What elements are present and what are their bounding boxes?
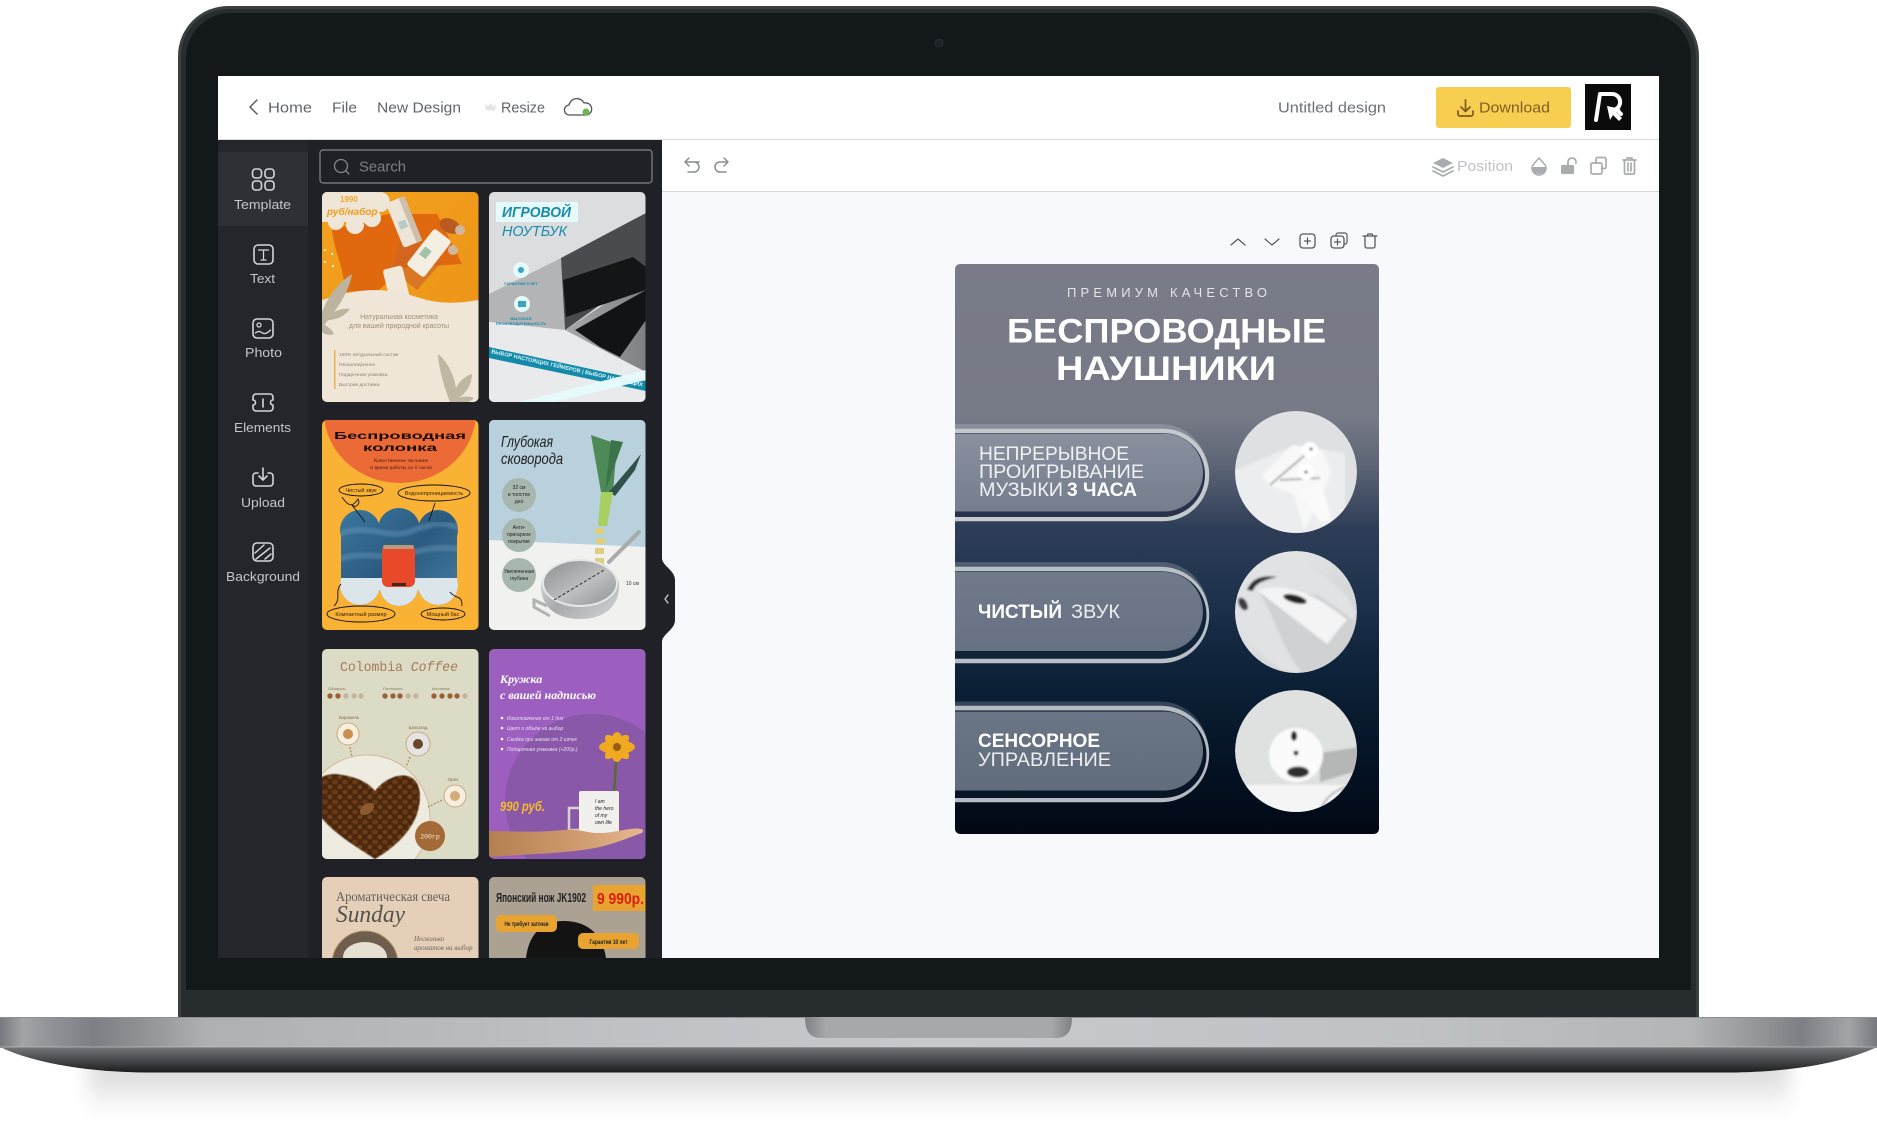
tool: text	[250, 245, 275, 286]
template card: cosmetics: Натуральная косметика	[360, 314, 438, 321]
template card: wireless speaker: Компактный размер	[335, 611, 387, 618]
search box	[320, 150, 652, 183]
template card: custom mug: 990 руб.	[500, 798, 545, 814]
price badge	[322, 192, 390, 234]
download button	[1436, 87, 1571, 128]
leek	[591, 435, 617, 492]
template card: frying pan: и толстое	[508, 492, 530, 498]
mug	[569, 808, 580, 830]
feature callouts	[327, 484, 470, 622]
bottles	[386, 196, 422, 248]
template card: wireless speaker: Качественное звучание	[374, 458, 429, 464]
template card: aromatic candle	[322, 877, 478, 958]
template card: colombia coffee: Карамель	[339, 715, 360, 720]
poster eyebrow: ПРЕМИУМ КАЧЕСТВО	[1067, 285, 1267, 300]
search box: Search	[359, 158, 406, 176]
template card: wireless speaker: Мощный бас	[427, 611, 460, 618]
template card: japanese knife: Гарантия 10 лет	[590, 940, 628, 946]
template card: colombia coffee: Шоколад	[409, 725, 428, 730]
template card: custom mug: own life	[595, 820, 612, 826]
template card: custom mug: Кружка	[499, 672, 542, 686]
feature photo: earbuds in case	[1235, 411, 1357, 534]
feature photo: earbud speaker mesh	[1235, 690, 1360, 815]
template panel	[304, 140, 679, 997]
template card: japanese knife: Не требует заточки	[504, 921, 549, 928]
template card: colombia coffee: Плотность:	[383, 686, 404, 691]
speaker	[382, 545, 415, 587]
secondary toolbar: Position	[1457, 158, 1513, 175]
top header bar: Home	[268, 100, 312, 116]
template card: custom mug: с вашей надписью	[500, 688, 596, 702]
template card: colombia coffee: Обжарка:	[328, 686, 346, 691]
laptop lid	[178, 6, 1699, 1017]
cream wave	[322, 290, 478, 402]
app screen	[218, 76, 1659, 997]
hand	[489, 829, 643, 857]
template card: aromatic candle: ароматов на выбор	[414, 944, 473, 952]
template card: gaming laptop: ВЫСОКАЯ	[511, 316, 532, 321]
template card: aromatic candle: Ароматическая свеча	[336, 889, 450, 904]
feature pill: touch control	[955, 702, 1208, 800]
leaves	[322, 274, 352, 335]
template card: cosmetics: 1990	[340, 195, 358, 204]
flower	[614, 749, 617, 791]
tool: template: Template	[234, 197, 291, 212]
poster: wireless headphones	[955, 264, 1379, 834]
tool: background	[226, 543, 300, 584]
template card: frying pan: Увеличенная	[504, 569, 534, 575]
photo window	[340, 508, 458, 606]
left sidebar	[218, 140, 308, 958]
feature pill: touch control: УПРАВЛЕНИЕ	[978, 749, 1111, 771]
feature pill: clear sound: ЗВУК	[1071, 601, 1121, 623]
template card: colombia coffee: Кислинка:	[432, 686, 451, 691]
template card: colombia coffee: Орех	[448, 777, 459, 782]
template card: frying pan: сковорода	[501, 451, 563, 468]
template card: custom mug: of my	[595, 813, 608, 819]
template card: frying pan: пригарное	[507, 532, 531, 538]
tool: upload	[241, 468, 285, 510]
tool: elements	[234, 394, 292, 435]
template card: gaming laptop	[489, 192, 646, 402]
poster toolbar icons	[1231, 233, 1377, 248]
top header bar: New Design	[377, 100, 461, 116]
template card: gaming laptop: НОУТБУК	[502, 224, 568, 240]
feature pill: continuous playback: НЕПРЕРЫВНОЕ	[979, 443, 1129, 465]
feature pill: continuous playback: 3 ЧАСА	[1067, 479, 1137, 501]
coffee heart	[312, 774, 420, 859]
tool: template	[218, 152, 308, 226]
weight badge	[415, 821, 445, 851]
template card: frying pan: 32 см	[513, 485, 526, 491]
template card: frying pan: 10 см	[626, 581, 639, 587]
flavor bubbles	[337, 723, 466, 807]
feature pill: continuous playback: МУЗЫКИ	[979, 479, 1063, 501]
template card: frying pan: Глубокая	[501, 434, 553, 451]
template card: gaming laptop: ПРОИЗВОДИТЕЛЬНОСТЬ	[496, 321, 546, 326]
template card: colombia coffee: Colombia Coffee	[340, 661, 458, 676]
template card: japanese knife: Японский нож JK1902	[496, 891, 586, 905]
tool: text: Text	[250, 271, 275, 286]
tool: photo: Photo	[245, 345, 282, 360]
download button: Download	[1479, 100, 1550, 116]
template card: wireless speaker	[322, 420, 478, 630]
feature pill: clear sound	[955, 562, 1208, 661]
template card: custom mug: Изготовление от 1 дня	[507, 716, 564, 722]
template card: frying pan: Анти-	[513, 525, 526, 531]
top header bar: Untitled design	[1278, 100, 1386, 116]
template card: cosmetics: для вашей природной красоты	[349, 322, 449, 330]
template card: gaming laptop: ГАРАНТИЯ 5 ЛЕТ	[504, 281, 538, 286]
template card: wireless speaker: Чистый звук	[345, 487, 377, 494]
template card: cosmetics: Подарочная упаковка	[339, 372, 388, 378]
template card: colombia coffee: 200гр	[420, 834, 440, 840]
feature pill: continuous playback: ПРОИГРЫВАНИЕ	[979, 461, 1144, 483]
template card: frying pan: дно	[515, 499, 523, 505]
template card: cosmetics: Быстрая доставка	[339, 382, 380, 388]
template card: colombia coffee	[322, 649, 478, 859]
top header bar: File	[332, 100, 357, 116]
template card: frying pan: глубина	[510, 576, 528, 582]
template card: custom mug: Скидка при заказе от 2 штук	[507, 737, 577, 743]
tool: elements: Elements	[234, 420, 292, 435]
template card: wireless speaker: Беспроводная	[334, 430, 466, 442]
template card: japanese knife	[489, 877, 646, 958]
template card: gaming laptop: ИГРОВОЙ	[502, 203, 572, 221]
template card: cosmetics	[322, 192, 478, 403]
collapse chevron	[665, 595, 668, 603]
logo	[1585, 84, 1631, 130]
template card: custom mug: the hero	[595, 806, 614, 812]
tool: background: Background	[226, 569, 300, 584]
template card: frying pan	[489, 420, 646, 630]
template card: frying pan: покрытие	[508, 539, 530, 545]
feature pill: clear sound: ЧИСТЫЙ	[978, 599, 1062, 623]
template card: wireless speaker: Водонепроницаемость	[405, 491, 463, 497]
poster title	[1009, 318, 1325, 380]
template card: custom mug: I am	[595, 799, 605, 805]
feature pill: continuous playback	[955, 424, 1208, 519]
tool: upload: Upload	[241, 495, 285, 510]
template card: cosmetics: руб/набор	[326, 206, 378, 218]
coffee plate	[322, 754, 430, 859]
template card: japanese knife: 9 990р.	[597, 891, 644, 908]
poster title: БЕСПРОВОДНЫЕ	[1007, 312, 1326, 350]
top header bar: Resize	[501, 100, 545, 116]
hinge notch	[805, 1017, 1072, 1038]
template card: wireless speaker: и время работы до 6 часов	[370, 464, 432, 471]
template card: cosmetics: 100% натуральный состав	[339, 351, 398, 358]
tool: photo	[245, 319, 282, 360]
laptop drop shadow	[88, 1060, 1789, 1114]
poster title: НАУШНИКИ	[1056, 350, 1276, 388]
template card: gaming laptop: ВЫБОР НАСТОЯЩИХ ГЕЙМЕРОВ | ВЫБОР НАСТОЯЩИХ	[491, 347, 644, 389]
template card: aromatic candle: Sunday	[336, 902, 405, 928]
laptop base	[0, 1017, 1877, 1072]
secondary toolbar	[662, 140, 1659, 192]
canvas background	[662, 191, 1659, 958]
template card: custom mug: Цвет и объём на выбор	[507, 726, 564, 732]
pan	[609, 532, 639, 562]
feature pill: touch control: СЕНСОРНОЕ	[978, 730, 1100, 752]
template card: custom mug	[489, 649, 646, 859]
top header bar	[218, 76, 1659, 140]
template card: aromatic candle: Несколько	[413, 935, 445, 943]
feature photo: earbud detail	[1235, 551, 1357, 673]
template card: custom mug: Подарочная упаковка (+200р.)	[507, 747, 578, 753]
template card: cosmetics: Гипоаллергенно	[339, 362, 375, 368]
template card: wireless speaker: колонка	[363, 442, 437, 454]
